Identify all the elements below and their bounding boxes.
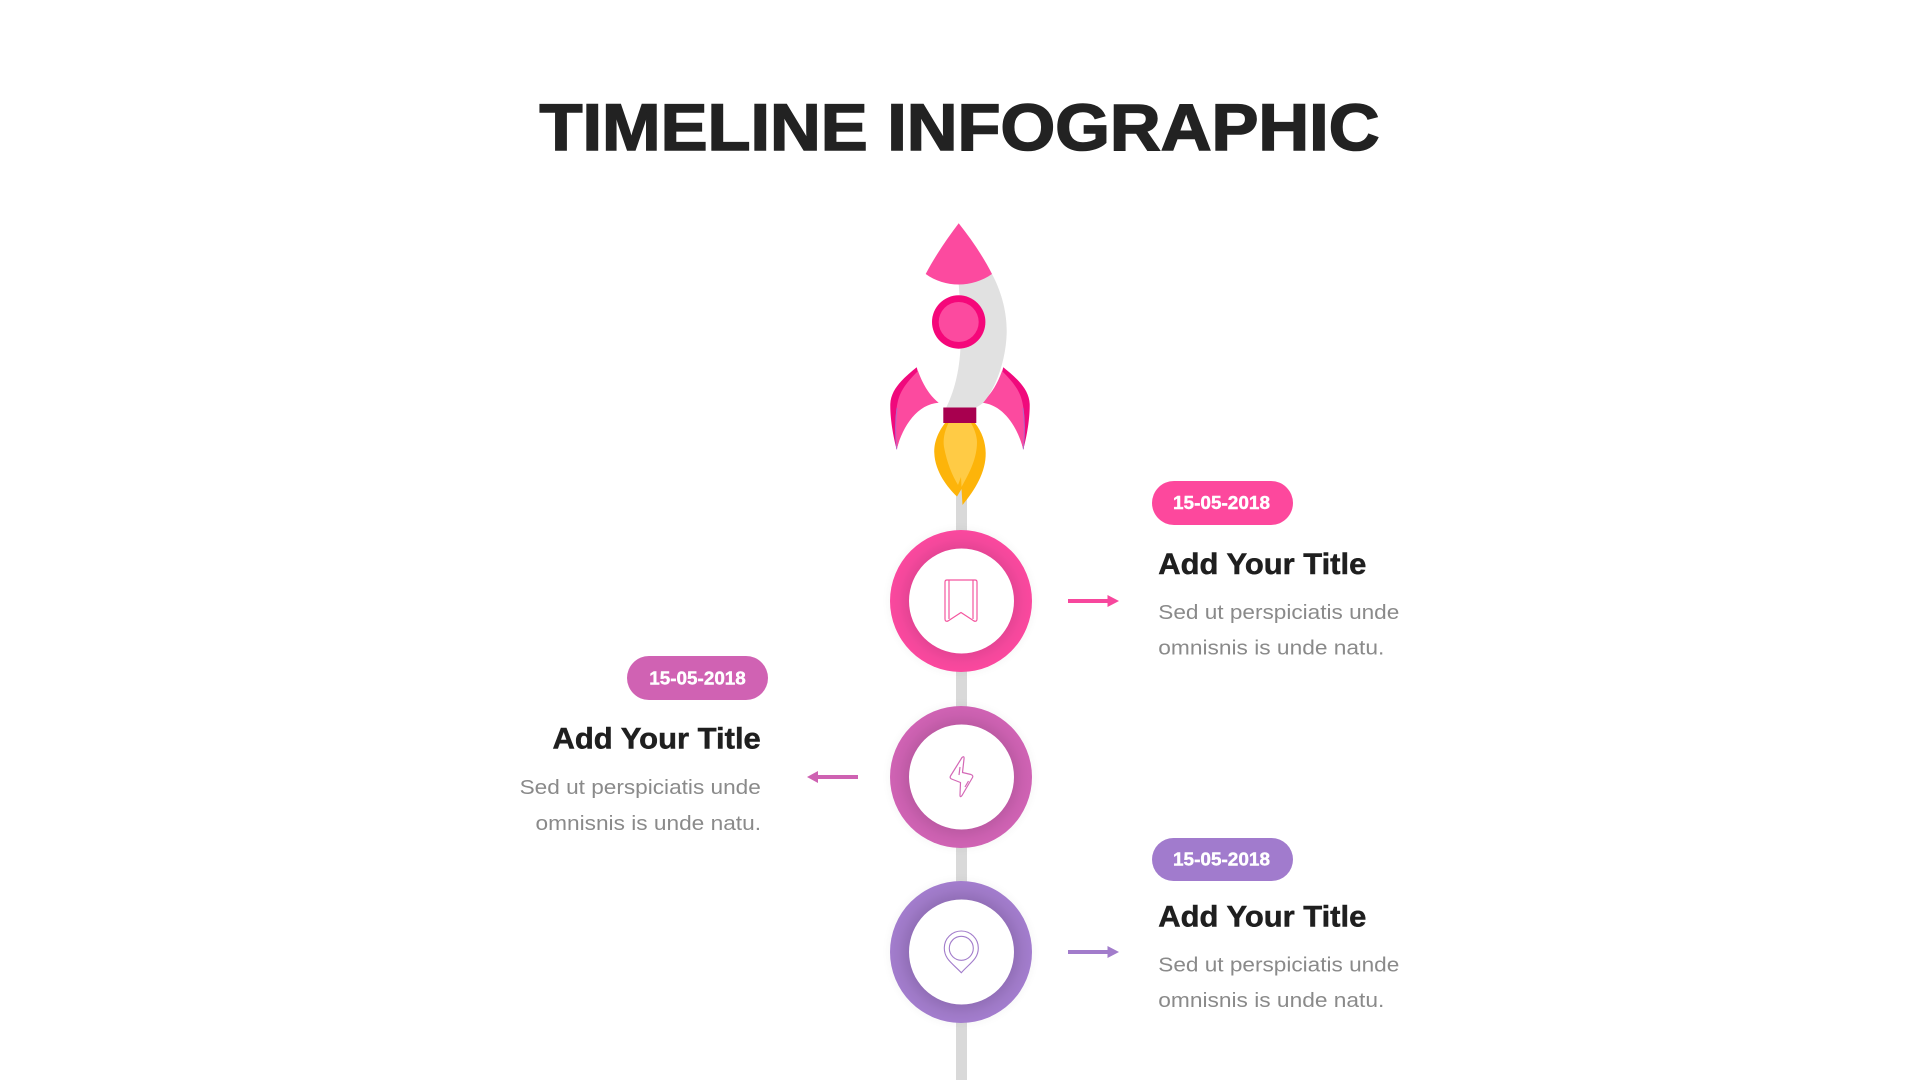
rocket window (932, 295, 985, 349)
description: Sed ut perspiciatis unde (520, 777, 761, 799)
date badge (1152, 481, 1293, 525)
date badge: 15-05-2018 (1173, 848, 1270, 869)
heading: Add Your Title (1158, 900, 1366, 933)
heading: Add Your Title (552, 722, 761, 755)
description (1158, 954, 1399, 1012)
date badge (1152, 838, 1293, 881)
panel: milestone 1 text (1152, 481, 1399, 660)
date badge (627, 656, 768, 700)
rocket body (946, 274, 1007, 408)
panel: milestone 2 text (520, 656, 768, 835)
rocket base (943, 408, 976, 423)
description: Sed ut perspiciatis unde (1158, 954, 1399, 976)
arrow: milestone 1 (1068, 595, 1119, 607)
rocket left fin (890, 367, 939, 449)
rocket flame (934, 423, 986, 505)
timeline vertical line (956, 480, 967, 1080)
icon: bookmark (945, 580, 977, 621)
panel: milestone 2 node (888, 704, 1034, 850)
arrow: milestone 3 (1068, 946, 1119, 958)
description: omnisnis is unde natu. (1158, 638, 1384, 660)
heading: Add Your Title (1158, 548, 1366, 581)
date badge: 15-05-2018 (1173, 492, 1270, 513)
icon: location pin (944, 931, 978, 973)
description: omnisnis is unde natu. (1158, 990, 1384, 1012)
description (520, 777, 761, 835)
rocket nose (926, 223, 992, 284)
description (1158, 602, 1399, 660)
panel: milestone 1 node (888, 528, 1034, 674)
icon: lightning bolt (950, 757, 973, 797)
icon: rocket (890, 223, 1030, 505)
panel: milestone 3 node (888, 879, 1034, 1025)
arrow: milestone 2 (807, 771, 858, 783)
rocket right fin (981, 367, 1030, 449)
title: TIMELINE INFOGRAPHIC (540, 90, 1380, 164)
panel: milestone 3 text (1152, 838, 1399, 1012)
date badge: 15-05-2018 (649, 667, 746, 688)
description: Sed ut perspiciatis unde (1158, 602, 1399, 624)
description: omnisnis is unde natu. (536, 813, 761, 835)
